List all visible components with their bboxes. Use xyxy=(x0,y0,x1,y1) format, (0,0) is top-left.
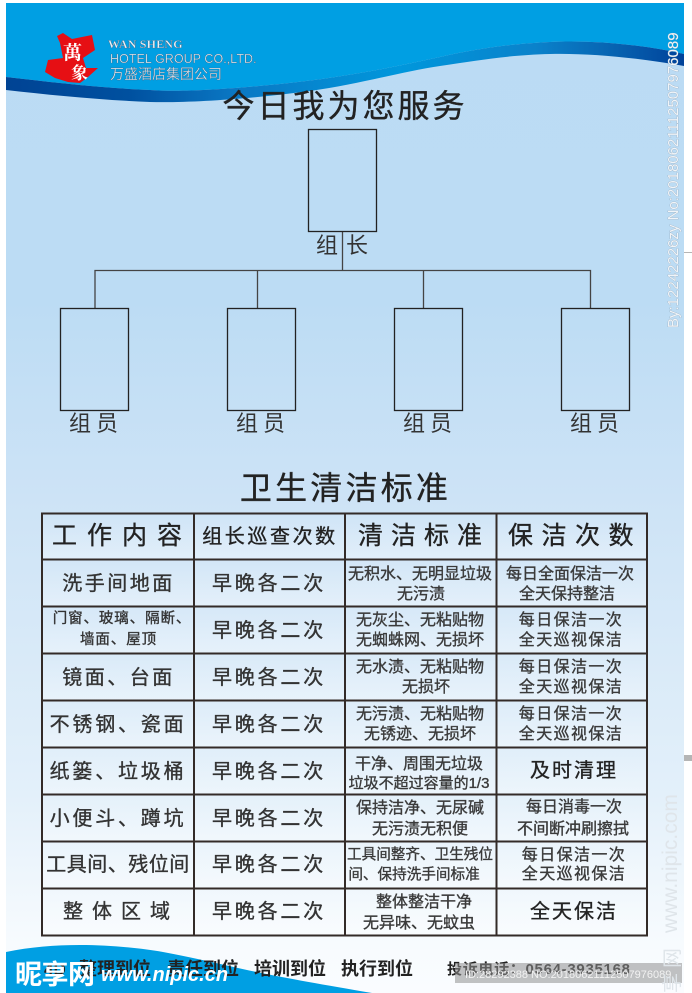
org chart connectors xyxy=(95,232,590,308)
column: leader inspection frequency xyxy=(212,572,326,923)
column: cleaning frequency: 每日保洁一次 xyxy=(522,846,626,864)
logo: company name xyxy=(108,37,257,82)
column: leader inspection frequency: 早晚各二次 xyxy=(212,619,326,642)
column: leader inspection frequency: 早晚各二次 xyxy=(212,807,326,830)
column: cleaning standard: 无灰尘、无粘贴物 xyxy=(356,611,484,629)
column: leader inspection frequency: 早晚各二次 xyxy=(212,853,326,876)
column: cleaning standard: 工具间整齐、卫生残位 xyxy=(347,846,493,863)
column: cleaning frequency: 每日消毒一次 xyxy=(526,798,622,816)
column: cleaning standard xyxy=(347,565,493,932)
member 3 photo box xyxy=(394,308,462,410)
slogan: responsibility: 责任到位 xyxy=(167,958,239,979)
title: cleaning standards: 卫生清洁标准 xyxy=(240,470,451,506)
title: service today: 今日我为您服务 xyxy=(222,88,468,124)
column: cleaning frequency xyxy=(506,565,634,923)
team leader label: 组长 xyxy=(316,233,376,258)
column: cleaning frequency: 每日全面保洁一次 xyxy=(506,565,634,583)
column: cleaning standard: 间、保持洗手间标准 xyxy=(348,866,480,883)
column: work content: 工具间、残位间 xyxy=(46,853,190,876)
column: cleaning frequency: 全天保洁 xyxy=(530,900,618,923)
column: cleaning standard: 无污渍无积便 xyxy=(372,820,468,838)
table cell backgrounds xyxy=(43,514,646,935)
slogan: execution: 执行到位 xyxy=(341,958,413,979)
cleaning standards table xyxy=(42,513,647,936)
member 1 photo box xyxy=(60,308,128,410)
column: cleaning frequency: 及时清理 xyxy=(530,759,618,782)
logo: company name: 万盛酒店集团公司 xyxy=(110,66,222,82)
column: cleaning standard: 无锈迹、无损坏 xyxy=(364,725,476,743)
table grid xyxy=(42,513,647,936)
vertical site watermark: www.nipic.com xyxy=(659,794,682,934)
column: cleaning standard: 无异味、无蚊虫 xyxy=(363,914,475,932)
column: leader inspection frequency: 早晚各二次 xyxy=(212,666,326,689)
column: leader inspection frequency: 早晚各二次 xyxy=(212,713,326,736)
image ID watermark band xyxy=(455,963,682,983)
slogan: tidy: 整理到位 xyxy=(79,958,151,979)
vertical site watermark xyxy=(659,794,684,993)
member 2 photo box xyxy=(228,308,296,410)
page edge marks xyxy=(684,252,692,761)
member 2 label: 组员 xyxy=(236,411,290,436)
column: cleaning standard: 整体整洁干净 xyxy=(376,893,472,911)
column: cleaning frequency: 每日保洁一次 xyxy=(519,611,623,629)
member 4 photo box xyxy=(562,308,630,410)
table header row: 工作内容 xyxy=(52,522,192,550)
footer blue wave xyxy=(6,945,372,993)
column: cleaning frequency: 每日保洁一次 xyxy=(519,658,623,676)
column: cleaning frequency: 全天巡视保洁 xyxy=(519,678,623,696)
column: cleaning frequency: 不间断冲刷擦拭 xyxy=(517,820,629,838)
column: cleaning standard: 干净、周围无垃圾 xyxy=(355,755,483,773)
footer slogan xyxy=(44,958,413,979)
header banner xyxy=(6,3,684,102)
column: leader inspection frequency: 早晚各二次 xyxy=(212,572,326,595)
column: work content: 小便斗、蹲坑 xyxy=(50,807,186,830)
column: leader inspection frequency: 早晚各二次 xyxy=(212,760,326,783)
table header row: 组长巡查次数 xyxy=(202,525,338,548)
vertical site watermark: 网 xyxy=(662,948,684,968)
logo: company name: HOTEL GROUP CO.,LTD. xyxy=(110,52,257,66)
column: work content: 墙面、屋顶 xyxy=(80,631,157,648)
column: cleaning standard: 无污渍、无粘贴物 xyxy=(356,705,484,723)
table header row: 保洁次数 xyxy=(508,522,642,550)
column: work content: 洗手间地面 xyxy=(62,572,175,595)
column: cleaning standard: 保持洁净、无尿碱 xyxy=(356,799,484,817)
logo: emblem characters: 萬 xyxy=(63,38,82,65)
column: cleaning standard: 无积水、无明显垃圾 xyxy=(348,565,492,583)
4D mark: 4D xyxy=(44,960,66,979)
site watermark: www.nipic.cn xyxy=(101,964,228,986)
logo: 象 xyxy=(71,59,88,84)
column: work content: 镜面、台面 xyxy=(62,666,175,689)
column: cleaning standard: 无水渍、无粘贴物 xyxy=(356,658,484,676)
logo xyxy=(45,33,257,84)
vertical author watermark: By:12242226zy No:20180621112507976089 xyxy=(665,32,682,328)
column: work content: 不锈钢、瓷面 xyxy=(50,713,186,736)
column: cleaning frequency: 全天巡视保洁 xyxy=(519,631,623,649)
slogan: training: 培训到位 xyxy=(254,958,326,979)
column: leader inspection frequency: 早晚各二次 xyxy=(212,900,326,923)
logo: red emblem xyxy=(45,33,98,83)
org chart xyxy=(60,130,630,436)
member 4 label: 组员 xyxy=(570,411,624,436)
column: work content xyxy=(46,572,191,923)
member 3 label: 组员 xyxy=(403,411,457,436)
complaint phone: 投诉电话：0564-3935168 xyxy=(447,960,631,978)
site watermark: 昵享网 xyxy=(15,960,94,990)
column: cleaning frequency: 全天巡视保洁 xyxy=(522,865,626,883)
column: cleaning standard: 无污渍 xyxy=(397,585,445,603)
logo: company name: WAN SHENG xyxy=(108,37,183,51)
site watermark xyxy=(15,960,228,990)
column: cleaning frequency: 全天巡视保洁 xyxy=(519,725,623,743)
column: cleaning frequency: 每日保洁一次 xyxy=(519,705,623,723)
column: cleaning standard: 垃圾不超过容量的1/3 xyxy=(349,775,489,792)
column: cleaning standard: 无损坏 xyxy=(402,678,450,696)
column: work content: 纸篓、垃圾桶 xyxy=(50,760,186,783)
table header row: 清洁标准 xyxy=(358,522,490,550)
column: work content: 整体区域 xyxy=(63,900,179,923)
member 1 label: 组员 xyxy=(69,411,123,436)
column: cleaning standard: 无蜘蛛网、无损坏 xyxy=(356,631,484,649)
table header row xyxy=(52,522,642,550)
vertical site watermark: 享 xyxy=(661,973,684,993)
image ID watermark band: ID:28292388 NO:20180621112507976089 xyxy=(465,969,671,981)
team leader photo box xyxy=(308,130,376,232)
column: work content: 门窗、玻璃、隔断、 xyxy=(53,609,191,627)
column: cleaning frequency: 全天保持整洁 xyxy=(519,585,615,603)
